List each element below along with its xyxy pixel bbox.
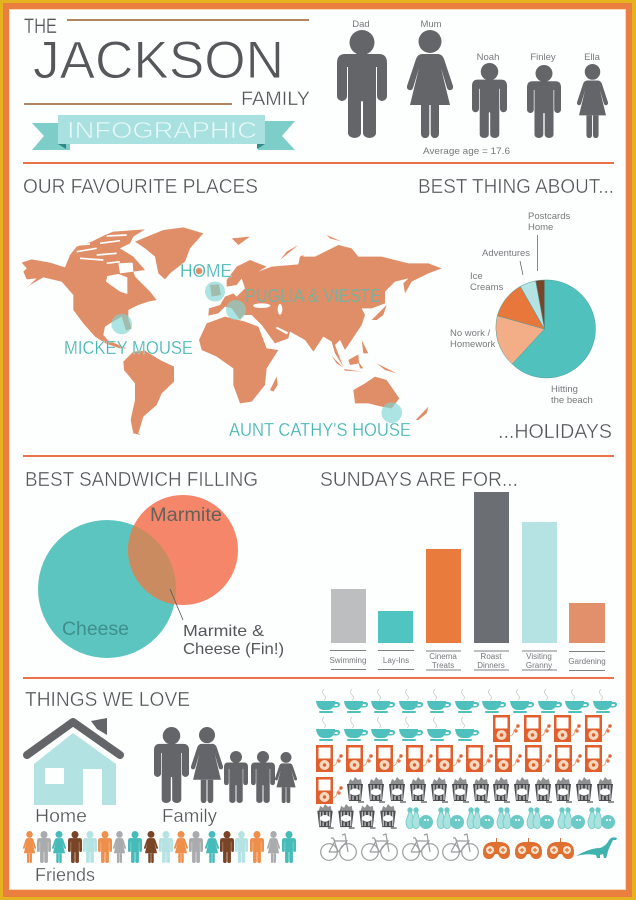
figure: ella [577, 52, 608, 138]
banner: infographic: INFOGRAPHIC [67, 117, 257, 143]
hudson bay and arctic channels [106, 263, 133, 294]
venn diagram: Cheese (Fin!) [183, 641, 284, 658]
pie chart: holidays: No work / [450, 328, 490, 339]
figure: ella: Ella [584, 52, 601, 63]
map labels: MICKEY MOUSE [64, 338, 193, 358]
heading: holidays: ...HOLIDAYS [498, 421, 612, 443]
icon: family group: Family [162, 806, 217, 826]
cups [316, 689, 617, 741]
icon: family group [154, 727, 297, 826]
bar chart: sundays: Gardening [568, 657, 606, 666]
pie chart: holidays: Postcards [528, 211, 570, 222]
map labels: PUGLIA & VIESTE [245, 286, 381, 306]
venn diagram [38, 495, 284, 658]
family figures [337, 19, 608, 138]
eurasia, africa and oceania [199, 235, 442, 420]
pie chart: holidays: Home [528, 222, 553, 233]
bar chart: sundays [330, 492, 606, 670]
heading: our favourite places: OUR FAVOURITE PLACES [23, 176, 258, 198]
bar chart: sundays: Dinners [477, 661, 505, 670]
title: FAMILY [241, 89, 310, 110]
americas [22, 227, 203, 435]
pie chart: holidays: Adventures [482, 248, 530, 259]
venn diagram: Marmite [150, 505, 222, 526]
figure: finley: Finley [530, 52, 556, 63]
average age: Average age = 17.6 [423, 146, 510, 157]
heading: sundays are for: SUNDAYS ARE FOR... [320, 469, 518, 491]
map labels: AUNT CATHY'S HOUSE [229, 420, 411, 440]
friends row [23, 831, 296, 885]
pie chart: holidays [450, 211, 595, 406]
bowling [406, 807, 615, 829]
figure: mum [407, 19, 453, 138]
title: THE [24, 15, 57, 38]
heading: best sandwich filling: BEST SANDWICH FILLING [25, 469, 258, 491]
popcorn [317, 777, 614, 828]
bar chart: sundays: Lay-Ins [383, 656, 409, 665]
bar chart: sundays: Cinema [429, 652, 457, 661]
bar chart: sundays: Roast [481, 652, 502, 661]
figure: dad: Dad [352, 19, 370, 30]
bar chart: sundays: Visiting [526, 652, 552, 661]
pie chart: holidays: Creams [470, 282, 504, 293]
icon grid: things we love [316, 689, 617, 860]
bar chart: sundays: Treats [432, 661, 454, 670]
venn diagram: Marmite & [183, 623, 264, 640]
heading: best thing about: BEST THING ABOUT... [418, 176, 614, 198]
figure: mum: Mum [420, 19, 442, 30]
bikes [321, 834, 478, 860]
icon: house: Home [35, 806, 87, 826]
banner: infographic [32, 115, 295, 150]
title: JACKSON [33, 31, 284, 90]
icon: dinosaur [576, 837, 617, 858]
title [24, 15, 310, 110]
bar chart: sundays: Swimming [330, 656, 366, 665]
location circles [111, 282, 402, 423]
figure: dad [337, 19, 387, 138]
figure: noah: Noah [477, 52, 499, 63]
pie chart: holidays: Hitting [551, 384, 578, 395]
game controllers [483, 838, 574, 859]
map labels: HOME [180, 261, 232, 281]
icon: house [27, 718, 120, 826]
world map [22, 227, 442, 435]
pie chart: holidays: Homework [450, 339, 496, 350]
bar chart: sundays: Granny [526, 661, 552, 670]
friends row: Friends [35, 865, 95, 885]
heading: things we love: THINGS WE LOVE [25, 689, 190, 711]
map labels [64, 261, 411, 440]
venn diagram: Cheese [62, 619, 129, 640]
figure: noah [472, 52, 507, 138]
figure: finley [527, 52, 561, 138]
pie chart: holidays: the beach [551, 395, 593, 406]
music players [316, 715, 612, 804]
pie chart: holidays: Ice [470, 271, 483, 282]
